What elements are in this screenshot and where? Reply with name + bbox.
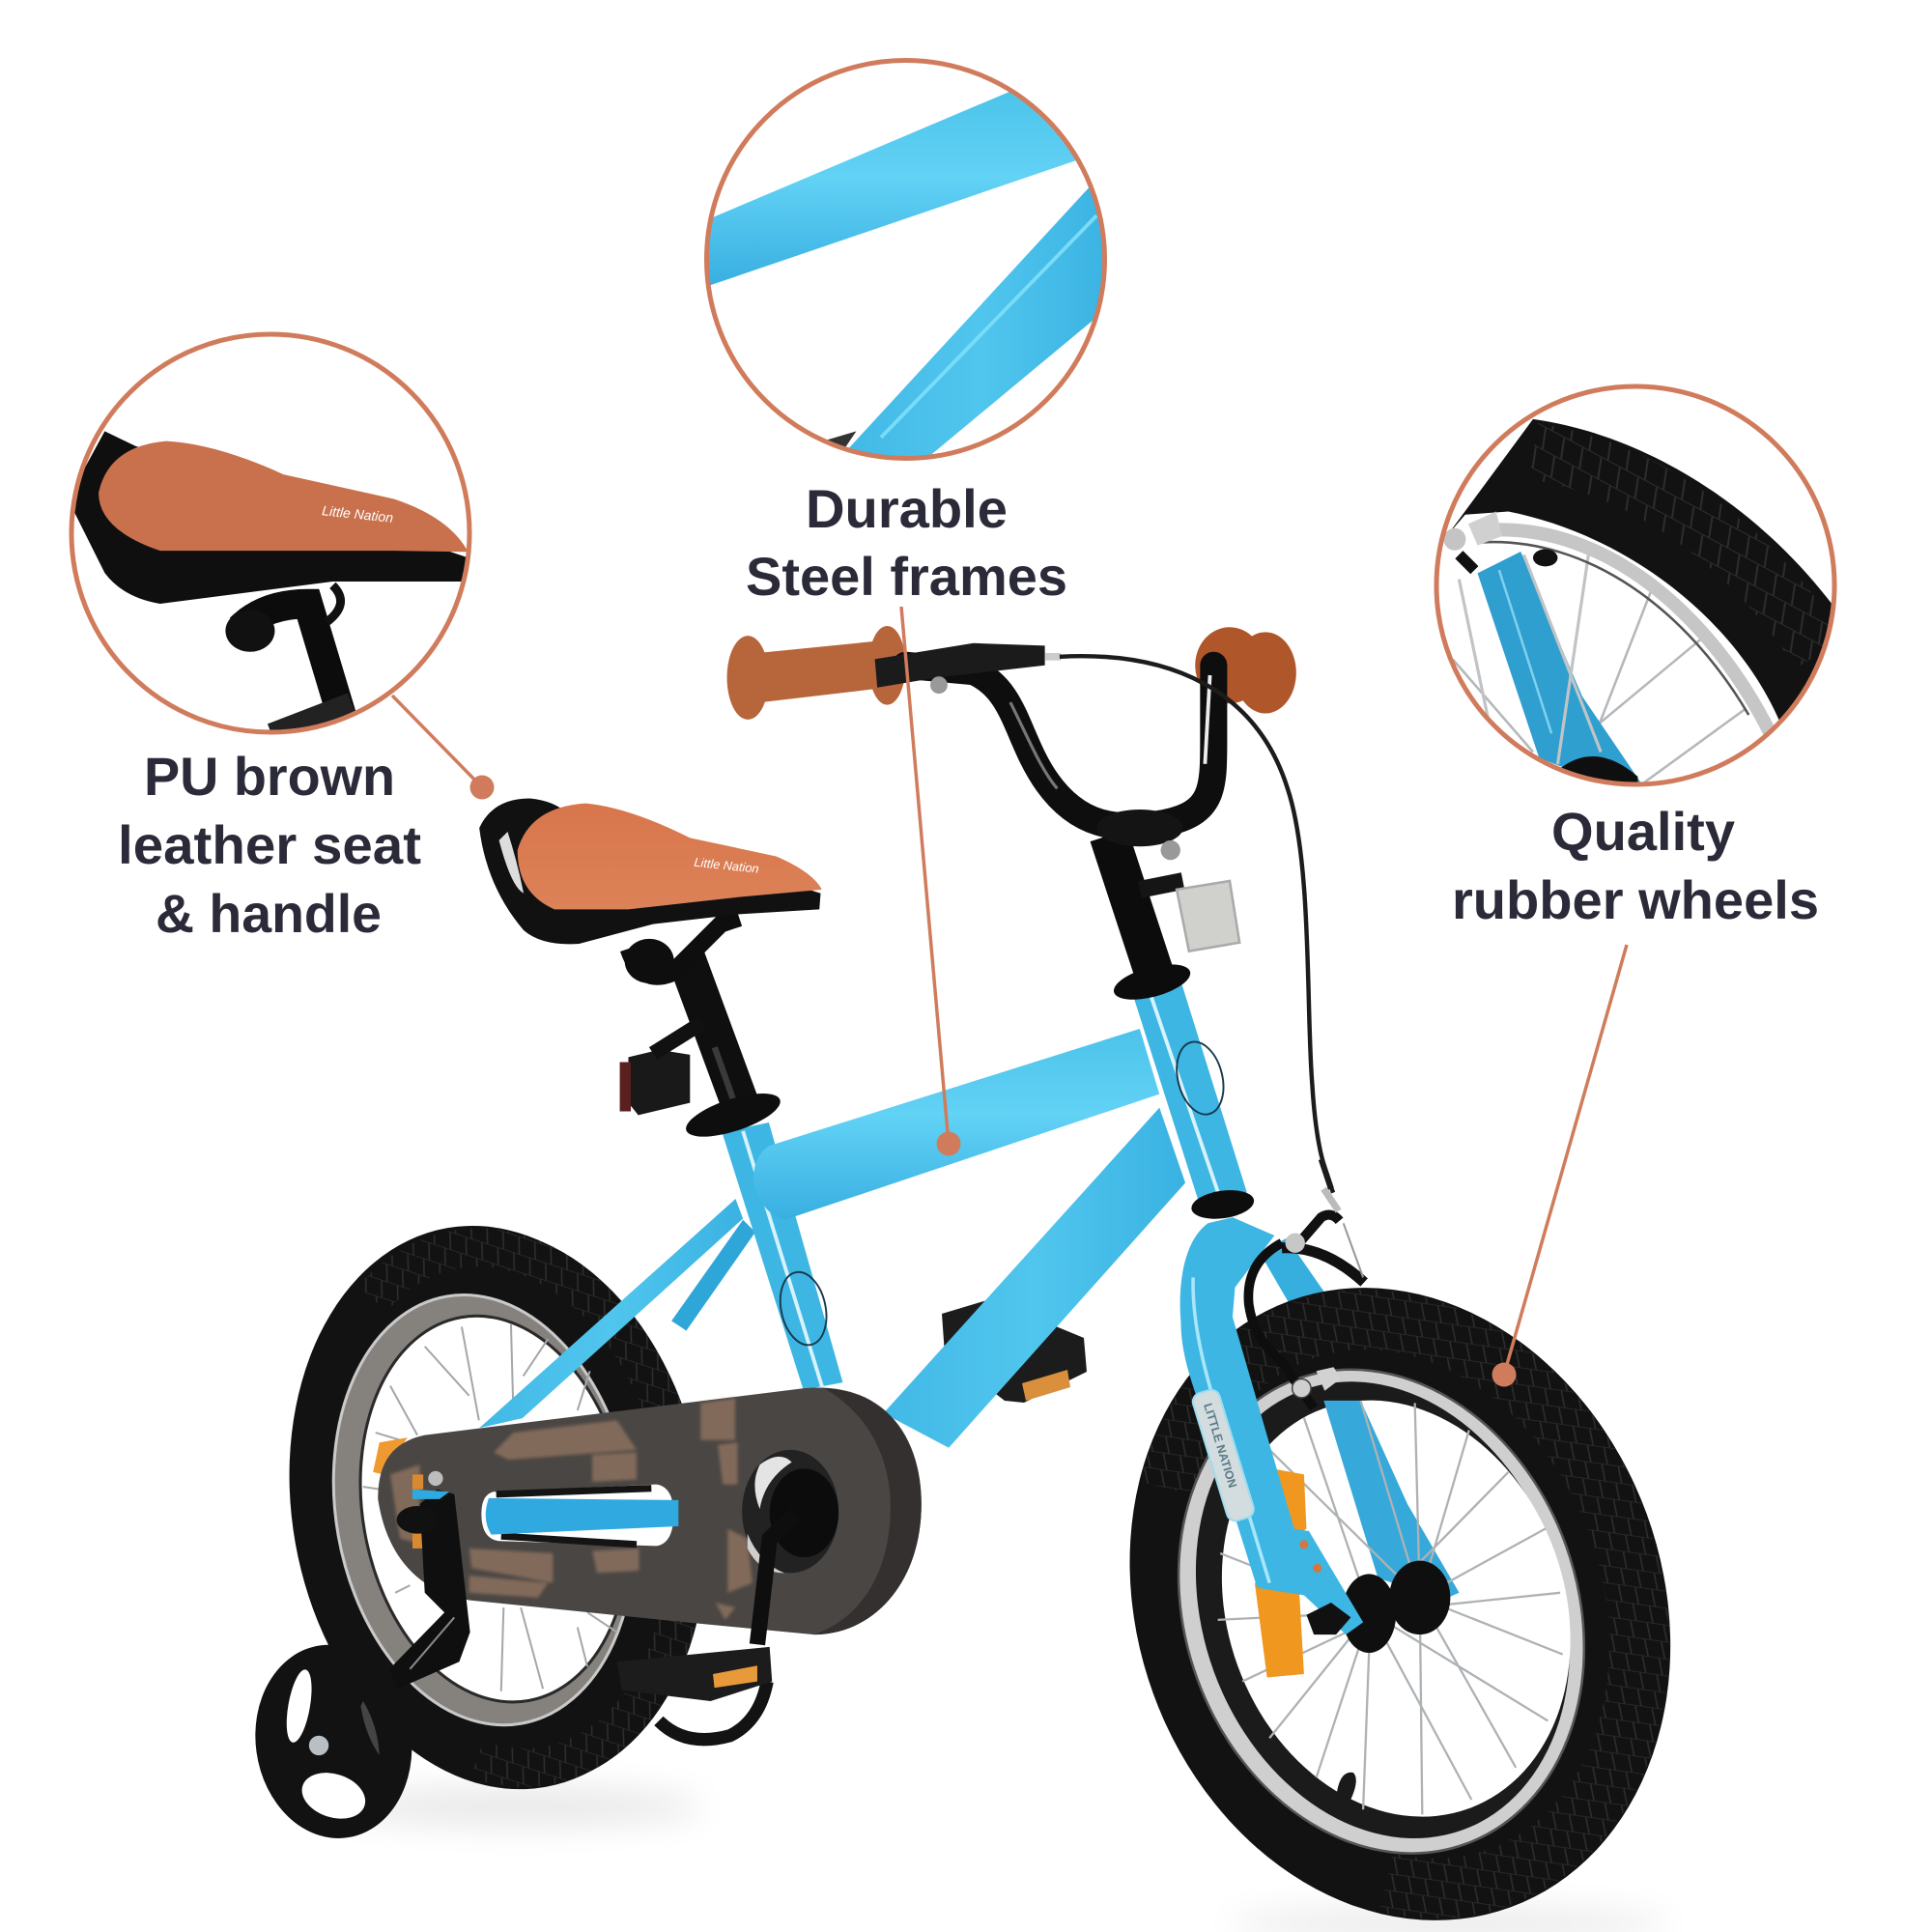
label: quality rubber wheels: rubber wheels [1452,869,1819,930]
right grip [1195,627,1296,714]
sprocket [742,1450,838,1573]
near fork leg [1180,1217,1363,1634]
seat tube [722,1122,842,1390]
seat stay [479,1199,743,1428]
label: durable steel frames [746,478,1067,607]
cable [1060,656,1333,1193]
label: PU brown leather seat and handle: & handle [156,883,382,944]
logo plate: LITTLE NATION [1201,1402,1239,1490]
left grip [727,626,905,720]
axle nut [1306,1603,1350,1634]
handlebar with grips, cable and reflector [727,626,1333,1193]
bar [905,666,1213,827]
detail circle: leather seat [68,334,469,733]
head tube [1132,980,1247,1210]
front reflector [1255,1468,1306,1678]
detail circle: steel frame [702,60,1115,466]
label: durable steel frames: Steel frames [746,546,1067,607]
down tube [884,1108,1185,1448]
slot [481,1485,673,1546]
reflector [1177,881,1239,952]
seat post, brake light and clamp [620,918,785,1146]
crank arm [757,1514,797,1644]
cover [378,1387,922,1634]
brake arch [1248,1243,1314,1408]
ground shadows [338,1789,1671,1932]
label: PU brown leather seat and handle: leather seat [118,814,421,875]
leader: wheel [1492,945,1627,1387]
near pedal [617,1647,772,1701]
leader: seat [392,696,495,800]
bike frame [479,980,1247,1448]
detail circle: rubber wheel [1436,386,1841,795]
far fork upper [1260,1238,1326,1312]
chain guard and drive [243,1387,922,1849]
label: quality rubber wheels [1452,801,1819,930]
far fork lower [1323,1401,1460,1600]
far pedal [942,1299,1087,1403]
top tube [753,1029,1159,1220]
rear wheel [246,1193,747,1823]
leader: frame [901,607,960,1155]
stem [1109,836,1158,985]
brake lever [875,643,1045,688]
logo plate [1191,1388,1256,1523]
training wheel bracket [389,1490,470,1689]
front wheel [1043,1159,1757,1932]
saddle [479,799,822,944]
label: PU brown leather seat and handle: PU brown [144,746,395,807]
label: durable steel frames: Durable [806,478,1008,539]
saddle: Little Nation [694,855,759,876]
label: PU brown leather seat and handle [118,746,421,944]
hub [1342,1561,1450,1653]
training wheel [243,1634,424,1849]
far seat stay [671,1220,755,1331]
far crank ring [659,1682,767,1740]
upper headset ring [1110,957,1194,1007]
detail circle: leather seat: Little Nation [322,502,394,526]
lower headset ring [1189,1186,1256,1223]
label: quality rubber wheels: Quality [1551,801,1735,862]
